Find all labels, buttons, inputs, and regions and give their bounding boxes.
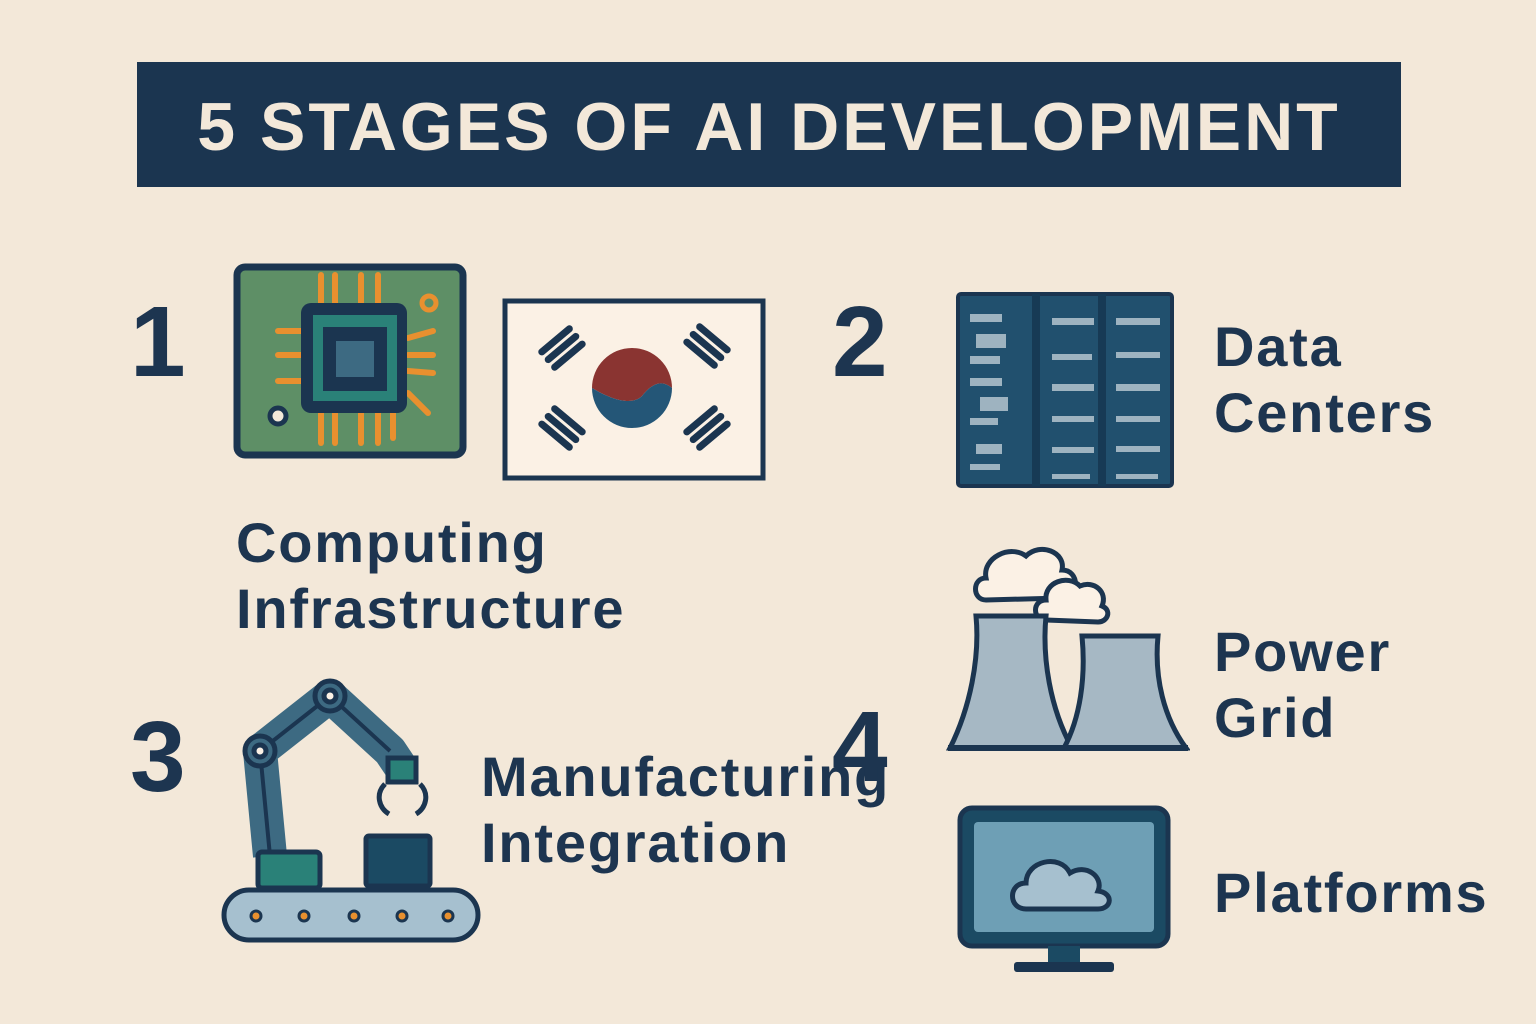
number 1: 1 <box>130 286 186 398</box>
label: Power Grid <box>1214 620 1391 749</box>
number 3: 3 <box>130 701 186 813</box>
label: Power Grid: Grid <box>1214 686 1336 749</box>
icon: robot arm on conveyor <box>222 678 480 942</box>
label: Power Grid: Power <box>1214 620 1391 683</box>
label: Computing Infrastructure <box>236 511 625 640</box>
icon: server racks <box>956 292 1174 488</box>
icon: Korean flag <box>502 298 766 480</box>
icon: monitor with cloud <box>958 806 1170 972</box>
label: Computing Infrastructure: Computing <box>236 511 548 574</box>
label: Data Centers: Centers <box>1214 381 1435 444</box>
label: Data Centers <box>1214 315 1435 444</box>
icon: power plant cooling towers <box>946 546 1190 751</box>
label: Manufacturing Integration: Manufacturing <box>481 745 890 808</box>
label: Data Centers: Data <box>1214 315 1343 378</box>
label: Manufacturing Integration: Integration <box>481 811 790 874</box>
number 2: 2 <box>832 286 888 398</box>
title banner: 5 STAGES OF AI DEVELOPMENT <box>197 89 1341 165</box>
label: Platforms: Platforms <box>1214 861 1488 924</box>
icon: computer chip <box>234 264 466 458</box>
title banner <box>137 62 1401 187</box>
number 4: 4 <box>832 691 888 803</box>
label: Computing Infrastructure: Infrastructure <box>236 577 625 640</box>
label: Manufacturing Integration <box>481 745 890 874</box>
